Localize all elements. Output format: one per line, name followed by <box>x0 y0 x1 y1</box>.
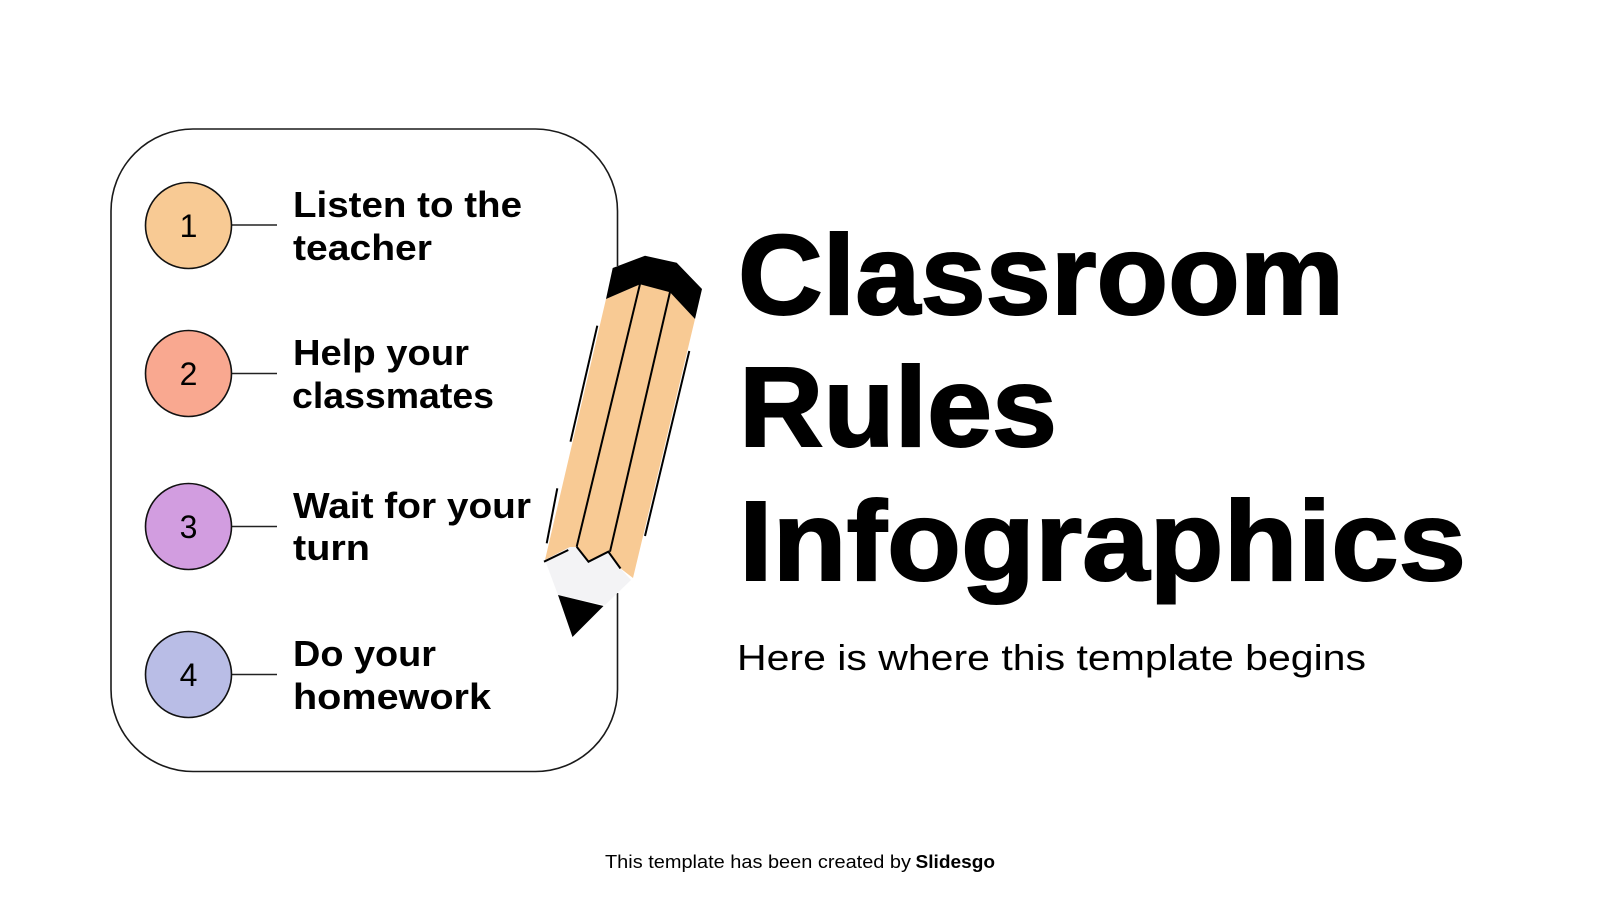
rule 2: 2 <box>180 356 197 392</box>
panel: rules card <box>111 129 618 772</box>
footer credit: This template has been created by <box>605 852 911 872</box>
rule 3: turn <box>293 527 370 568</box>
rule 1: 1 <box>180 208 197 244</box>
rule 3: 3 <box>180 509 197 545</box>
rule 4: Do your <box>293 633 436 674</box>
rule 3: Wait for your <box>293 485 531 526</box>
rule 2: classmates <box>292 375 494 416</box>
title: Rules <box>739 344 1057 470</box>
title: Infographics <box>739 478 1466 604</box>
rule 4: 4 <box>180 657 197 693</box>
rule 2 <box>146 330 494 416</box>
subtitle: Here is where this template begins <box>737 637 1366 678</box>
title <box>738 212 1466 604</box>
icon: pencil <box>544 256 702 637</box>
rule 4: homework <box>293 676 492 717</box>
rule 2: Help your <box>293 332 469 373</box>
rule 3 <box>146 484 531 570</box>
rule 4 <box>146 632 492 718</box>
rule 1: Listen to the <box>293 184 522 225</box>
footer credit: Slidesgo <box>916 852 995 872</box>
title: Classroom <box>738 212 1344 338</box>
rule 1 <box>146 182 522 268</box>
rule 1: teacher <box>293 227 432 268</box>
